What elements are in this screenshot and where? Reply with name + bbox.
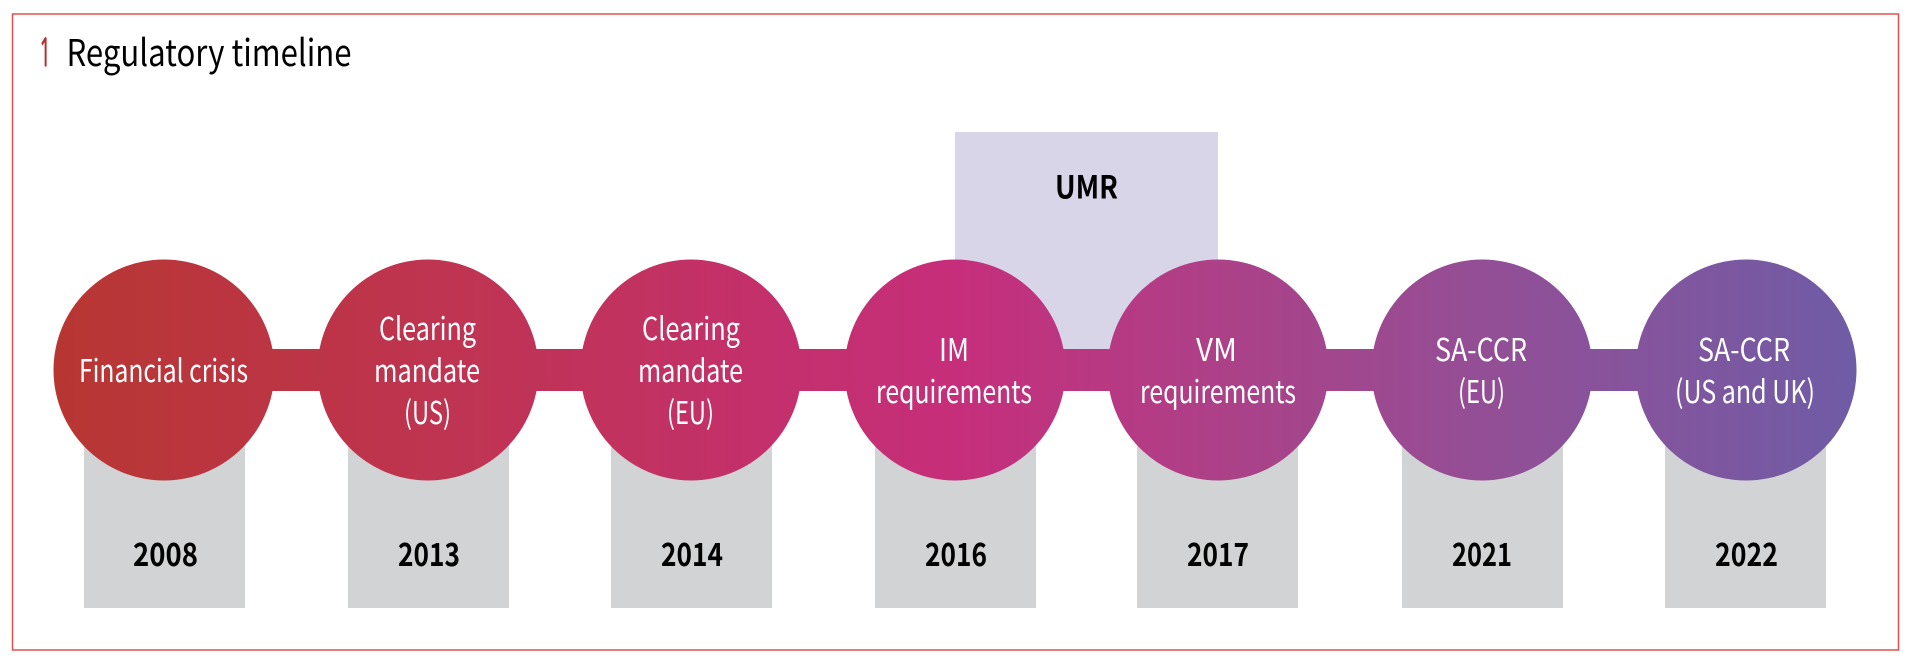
- year box 2016: 2016: [925, 530, 987, 576]
- node: SA-CCR (US and UK): SA-CCR: [1698, 325, 1790, 371]
- year box 2017: 2017: [1187, 530, 1249, 576]
- node: Clearing mandate (US): (US): [404, 388, 451, 434]
- timeline connector bar: [164, 349, 1746, 391]
- year box 2021: 2021: [1452, 530, 1512, 576]
- year box 2014: [611, 400, 772, 608]
- node: SA-CCR (EU): (EU): [1458, 367, 1505, 413]
- node: VM requirements: requirements: [1140, 367, 1296, 413]
- year box 2021: [1402, 400, 1563, 608]
- node: Financial crisis: Financial crisis: [79, 346, 248, 392]
- title: 1: [39, 34, 51, 72]
- node: SA-CCR (US and UK): [1636, 260, 1856, 480]
- node: Clearing mandate (EU): [580, 260, 802, 480]
- year box 2022: [1665, 400, 1826, 608]
- node: VM requirements: [1108, 260, 1328, 480]
- year box 2017: [1137, 400, 1298, 608]
- node: Financial crisis: [54, 260, 274, 480]
- node: VM requirements: VM: [1196, 325, 1237, 371]
- year box 2014: 2014: [661, 530, 723, 576]
- node: SA-CCR (EU): [1372, 260, 1592, 480]
- year box 2022: 2022: [1715, 530, 1778, 576]
- node: SA-CCR (EU): SA-CCR: [1435, 325, 1527, 371]
- node: IM requirements: requirements: [876, 367, 1032, 413]
- year box 2008: 2008: [133, 530, 198, 576]
- node: Clearing mandate (US): [318, 260, 538, 480]
- title: Regulatory timeline: [66, 23, 352, 77]
- node: SA-CCR (US and UK): (US and UK): [1675, 367, 1815, 413]
- node: Clearing mandate (EU): (EU): [667, 388, 714, 434]
- UMR box: UMR: [1055, 162, 1118, 208]
- year box 2008: [84, 400, 245, 608]
- node: Clearing mandate (US): Clearing: [379, 304, 476, 350]
- node: IM requirements: IM: [939, 325, 969, 371]
- year box 2013: [348, 400, 509, 608]
- year box 2016: [875, 400, 1036, 608]
- node: Clearing mandate (US): mandate: [374, 346, 480, 392]
- UMR box: [955, 132, 1218, 362]
- node: IM requirements: [844, 260, 1066, 480]
- year box 2013: 2013: [398, 530, 460, 576]
- node: Clearing mandate (EU): Clearing: [642, 304, 740, 350]
- node: Clearing mandate (EU): mandate: [638, 346, 743, 392]
